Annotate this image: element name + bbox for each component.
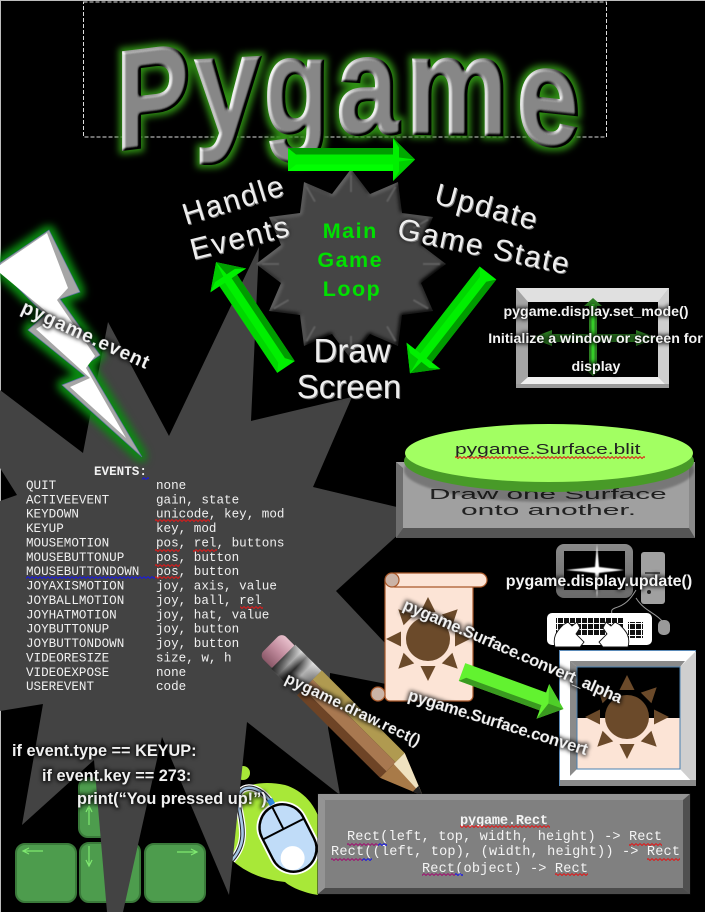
set_mode text: [488, 304, 703, 375]
event attributes: joy, button: [156, 623, 239, 637]
event names: JOYAXISMOTION: [26, 580, 124, 594]
pencil: [258, 632, 435, 808]
event attributes: none: [156, 479, 186, 493]
title: e: [517, 16, 580, 177]
star label: Game: [317, 248, 383, 272]
set_mode text: pygame.display.set_mode(): [503, 304, 689, 320]
display.update label: pygame.display.update(): [506, 573, 692, 590]
event names: USEREVENT: [26, 680, 94, 694]
burst background shape: [0, 247, 422, 912]
button top: [404, 424, 694, 492]
star label: Loop: [323, 277, 381, 301]
event names: VIDEORESIZE: [26, 651, 109, 665]
draw screen label: Draw: [313, 332, 391, 369]
title: a: [337, 8, 400, 163]
code example: [12, 742, 267, 808]
event names: JOYBUTTONUP: [26, 623, 109, 637]
event names: KEYUP: [26, 522, 64, 536]
rect text: Rect(left, top, width, height) -> Rect: [347, 830, 662, 845]
mouse with lime blob: [232, 766, 324, 895]
update game state label: Update: [431, 178, 542, 237]
title: y: [195, 6, 261, 165]
event attributes: joy, ball, rel: [156, 594, 262, 608]
events table: [26, 465, 292, 694]
main game loop star: [256, 169, 446, 359]
event names: VIDEOEXPOSE: [26, 666, 109, 680]
set_mode text: display: [572, 359, 621, 375]
handle events label: Events: [187, 210, 294, 267]
blit description: [429, 486, 667, 519]
draw screen label: Screen: [297, 368, 401, 405]
event attributes: pos, rel, buttons: [156, 536, 284, 550]
event attributes: pos, button: [156, 565, 239, 579]
set_mode text: Initialize a window or screen for: [488, 331, 703, 347]
blit description: onto another.: [461, 502, 636, 519]
title: m: [406, 10, 509, 165]
blit heading: pygame.Surface.blit: [455, 440, 640, 457]
sun image frame: [560, 650, 696, 786]
rect text: [331, 814, 680, 877]
event attributes: unicode, key, mod: [156, 508, 284, 522]
event names: JOYHATMOTION: [26, 608, 117, 622]
title box: [84, 2, 606, 180]
event attributes: joy, button: [156, 637, 239, 651]
rect text: Rect((left, top), (width, height)) -> Rect: [331, 845, 680, 860]
blit button: [396, 424, 695, 538]
event attributes: code: [156, 680, 186, 694]
code example: print(“You pressed up!”): [77, 790, 267, 808]
code example: if event.key == 273:: [42, 767, 191, 785]
pygame.Rect panel: [318, 794, 690, 894]
event names: QUIT: [26, 479, 57, 493]
code example: if event.type == KEYUP:: [12, 742, 197, 760]
arrow: update to draw: [393, 260, 505, 386]
title: P: [116, 14, 191, 180]
event attributes: pos, button: [156, 551, 239, 565]
event names: JOYBUTTONDOWN: [26, 637, 124, 651]
event names: MOUSEBUTTONUP: [26, 551, 124, 565]
rect text: pygame.Rect: [460, 814, 548, 829]
event names: MOUSEMOTION: [26, 536, 109, 550]
title: [116, 6, 580, 180]
arrow keys: [16, 778, 205, 902]
arrow: convert: [456, 655, 570, 726]
event attributes: key, mod: [156, 522, 216, 536]
pygame.event label: pygame.event: [18, 297, 153, 374]
event attributes: joy, axis, value: [156, 580, 277, 594]
update game state label: [395, 178, 574, 281]
blit description: Draw one Surface: [429, 486, 667, 502]
event names: ACTIVEEVENT: [26, 493, 110, 507]
update game state label: Game State: [395, 213, 574, 281]
convert_alpha label: pygame.Surface.convert_alpha: [400, 595, 626, 707]
arrow: events to update: [288, 138, 415, 181]
event attributes: none: [156, 666, 186, 680]
event names: KEYDOWN: [26, 508, 79, 522]
display set_mode frame: [488, 288, 703, 388]
event attributes: joy, hat, value: [156, 608, 269, 622]
event attributes: size, w, h: [156, 651, 232, 665]
convert label: pygame.Surface.convert: [406, 686, 591, 759]
cross arrows: [531, 298, 657, 376]
computer icon: [547, 544, 670, 647]
events heading: EVENTS:: [94, 465, 147, 479]
handle events label: [178, 169, 294, 267]
star label: Main: [323, 219, 378, 243]
pencil label: pygame.draw.rect(): [282, 670, 423, 750]
draw screen label: [297, 332, 401, 405]
event names: MOUSEBUTTONDOWN: [26, 565, 139, 579]
lightning bolt: [0, 230, 142, 457]
event attributes: gain, state: [156, 493, 239, 507]
arrow: draw to events: [198, 250, 304, 379]
rect text: Rect(object) -> Rect: [422, 862, 588, 877]
event names: JOYBALLMOTION: [26, 594, 124, 608]
scroll: [371, 573, 487, 701]
handle events label: Handle: [178, 169, 289, 232]
title: g: [264, 11, 330, 163]
